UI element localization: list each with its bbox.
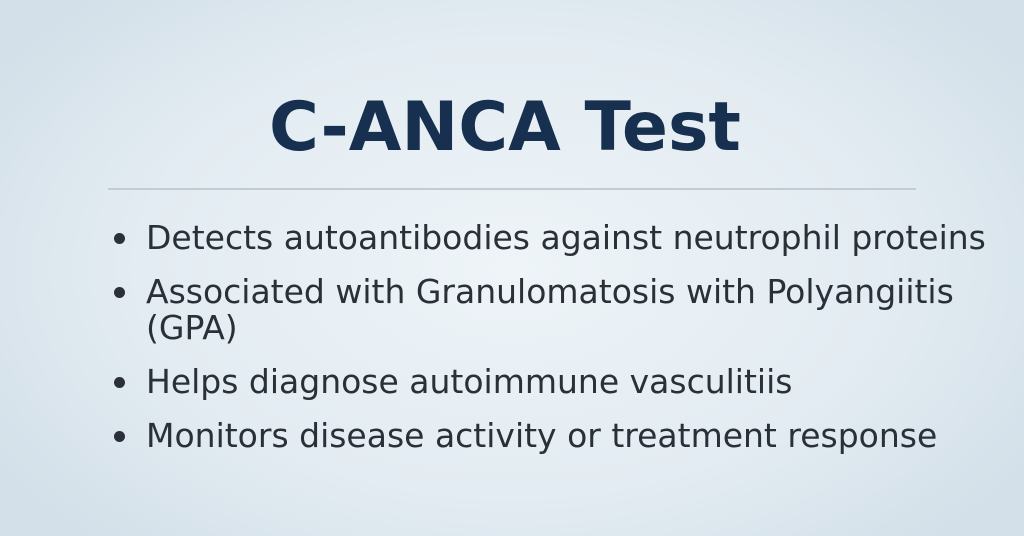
bullet: associated with GPA: Associated with Granulomatosis with Polyangiitis bbox=[146, 272, 954, 311]
title: C-ANCA Test bbox=[269, 88, 741, 167]
bullet: associated with GPA: (GPA) bbox=[146, 308, 238, 347]
bullet: associated with GPA bbox=[114, 272, 954, 347]
bullet list bbox=[114, 218, 986, 455]
bullet: helps diagnose: Helps diagnose autoimmune vasculitiis bbox=[146, 362, 792, 401]
bullet: monitors: Monitors disease activity or treatment response bbox=[146, 416, 937, 455]
bullet: detects autoantibodies: Detects autoantibodies against neutrophil proteins bbox=[146, 218, 986, 257]
